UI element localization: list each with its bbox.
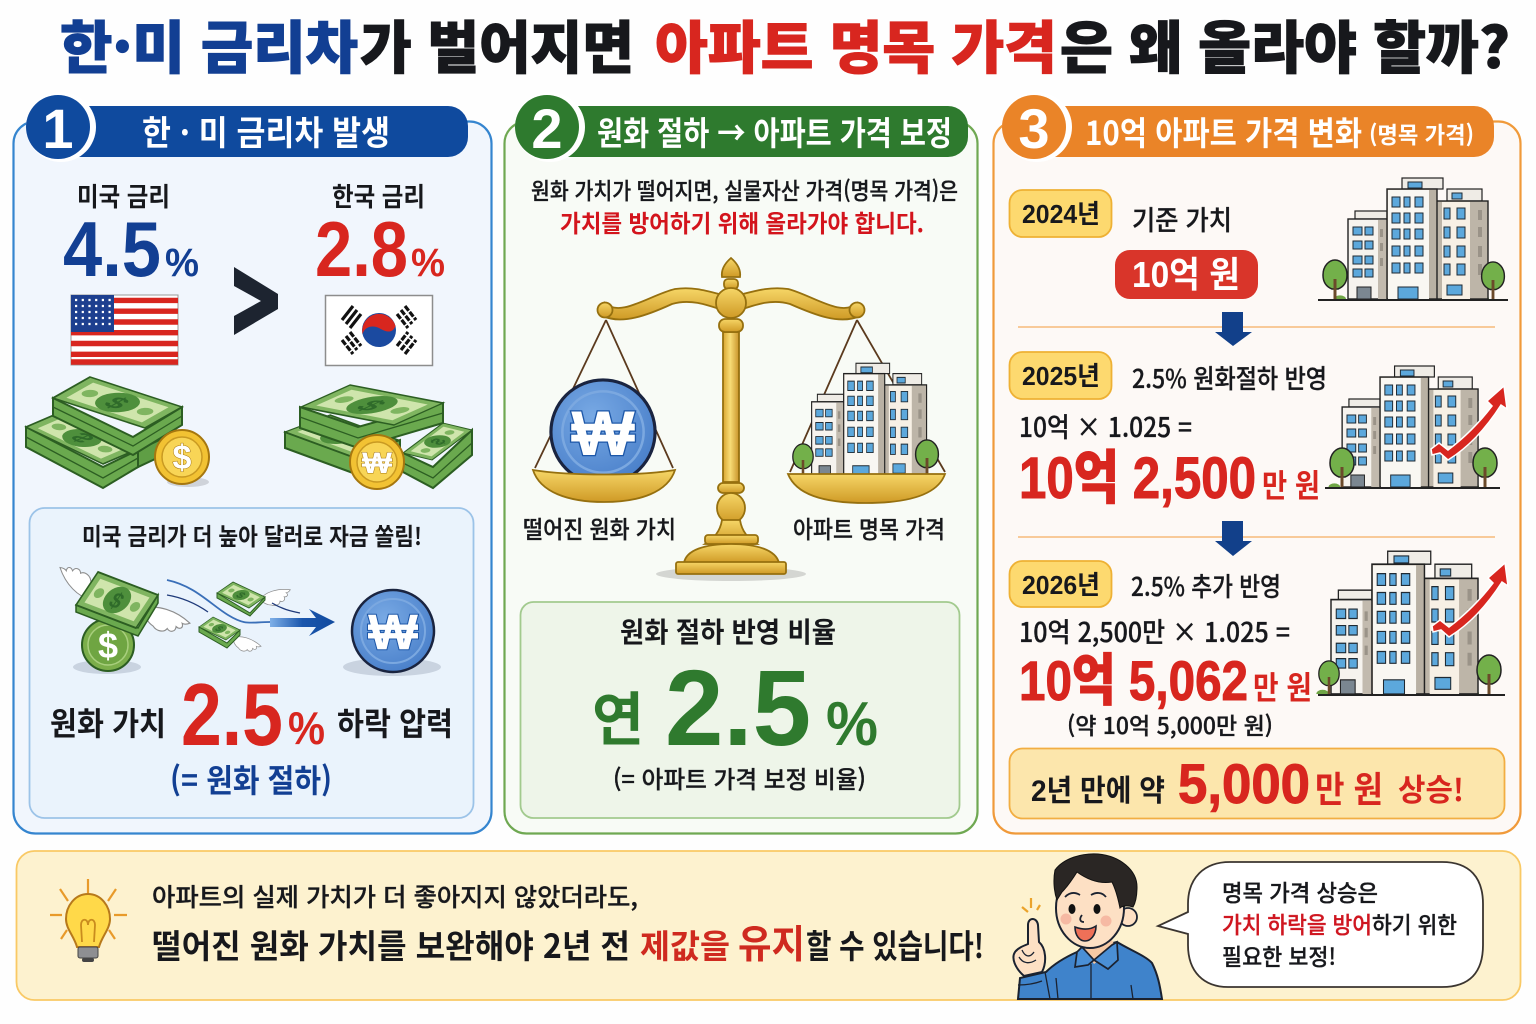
text: explanation: 원화 가치가 떨어지면, 실물자산 가격(명목 가격)은 xyxy=(531,172,958,206)
US rate xyxy=(63,177,199,293)
greater-than sign xyxy=(234,267,278,335)
header: step 3: (명목 가격) xyxy=(1369,116,1474,150)
header: step 2: 원화 절하 → 아파트 가격 보정 xyxy=(597,107,952,155)
callout: capital flight xyxy=(30,508,474,818)
row: 2024: 10억 원 xyxy=(1132,254,1240,295)
icon: balance scale xyxy=(535,258,945,581)
title xyxy=(60,3,1510,85)
header: step 1: 한 · 미 금리차 발생 xyxy=(142,106,390,155)
icon: left pan xyxy=(533,470,675,502)
text: explanation xyxy=(531,172,958,239)
label: nominal apartment price: 아파트 명목 가격 xyxy=(793,510,945,545)
arrow xyxy=(270,609,335,636)
US rate: 미국 금리 xyxy=(77,177,170,214)
callout: capital flight: 미국 금리가 더 높아 달러로 자금 쏠림! xyxy=(82,517,422,552)
row: 2024 xyxy=(1010,190,1258,299)
row: 2026: (약 10억 5,000만 원) xyxy=(1067,707,1273,741)
row: 2026: 10억 5,062 xyxy=(1019,649,1248,712)
text: takeaway: 제값을 xyxy=(640,920,730,968)
callout: speech bubble: 필요한 보정! xyxy=(1222,938,1336,972)
header: step 2 xyxy=(515,92,968,162)
title: 한·미 금리차 xyxy=(60,3,358,85)
row: 2026: 2.5% 추가 반영 xyxy=(1131,567,1281,604)
US rate: % xyxy=(165,241,199,285)
text: won value pressure xyxy=(50,665,453,802)
text: explanation: 가치를 방어하기 위해 올라가야 합니다. xyxy=(560,204,924,239)
icon: won coin on pan xyxy=(551,380,655,484)
icon: apartments on pan xyxy=(793,363,938,477)
icon: Korea flag xyxy=(326,296,432,366)
row: 2024: 기준 가치 xyxy=(1132,199,1232,238)
header: step 1 xyxy=(26,92,468,162)
row: 2026 xyxy=(1010,561,1312,741)
header: step 3: 10억 아파트 가격 변화 xyxy=(1085,107,1362,155)
row: 2025 xyxy=(1010,352,1327,511)
panel: bottom takeaway xyxy=(16,851,1520,1000)
icon: flying dollars xyxy=(54,559,300,674)
callout: reflection rate: % xyxy=(826,690,878,759)
callout: reflection rate: 2.5 xyxy=(665,647,811,768)
callout: reflection rate xyxy=(520,602,960,818)
text: won value pressure: % xyxy=(288,702,325,754)
icon: right pan xyxy=(788,474,945,503)
row: 2025: 만 원 xyxy=(1262,461,1320,507)
Korea rate: 2.8 xyxy=(315,205,408,293)
icon: won cash stack xyxy=(285,385,472,488)
Korea rate xyxy=(315,177,445,293)
icon: apartments 2024 xyxy=(1318,178,1508,300)
Korea rate: % xyxy=(411,241,445,285)
text: won value pressure: 하락 압력 xyxy=(337,699,453,745)
callout: total rise: 2년 만에 약 xyxy=(1031,775,1165,808)
arrow down xyxy=(1215,312,1252,346)
title: 은 왜 올라야 할까? xyxy=(1060,3,1510,85)
title: 아파트 명목 가격 xyxy=(655,3,1057,85)
icon: apartments 2025 with rising arrow xyxy=(1325,366,1507,488)
panel: 1 interest rate gap xyxy=(14,92,492,834)
icon: flying dollars: $ xyxy=(98,625,118,666)
callout: speech bubble: 가치 하락을 방어 xyxy=(1222,906,1372,940)
icon: won coin xyxy=(343,590,441,676)
US rate: 4.5 xyxy=(63,205,161,293)
row: 2025: 10억 2,500 xyxy=(1019,446,1256,511)
panel: 3 apartment price change xyxy=(994,92,1520,834)
header: step 3: 3 xyxy=(1018,97,1050,160)
Korea rate: 한국 금리 xyxy=(332,177,425,214)
callout: speech bubble xyxy=(1158,862,1483,987)
callout: total rise: 5,000 xyxy=(1178,752,1310,815)
row: 2025: 2025년 xyxy=(1022,361,1100,391)
callout: total rise xyxy=(1010,748,1504,818)
divider xyxy=(1018,327,1495,537)
header: step 3 xyxy=(1002,92,1494,162)
icon: dollar coin: $ xyxy=(173,439,192,477)
text: takeaway: 떨어진 원화 가치를 보완해야 2년 전 xyxy=(152,920,630,968)
text: won value pressure: 2.5 xyxy=(181,665,283,764)
icon: dollar cash stack xyxy=(26,377,182,488)
icon: presenter character xyxy=(1013,854,1162,999)
callout: reflection rate: (= 아파트 가격 보정 비율) xyxy=(613,760,866,795)
row: 2025: 2.5% 원화절하 반영 xyxy=(1132,359,1327,396)
callout: speech bubble: 명목 가격 상승은 xyxy=(1222,874,1378,908)
text: takeaway: 유지 xyxy=(738,914,805,970)
title: 가 벌어지면 xyxy=(360,3,634,85)
row: 2026: 10억 2,500만 × 1.025 = xyxy=(1019,611,1290,650)
text: won value pressure: (= 원화 절하) xyxy=(170,756,332,802)
arrow down xyxy=(1215,521,1252,556)
text: won value pressure: 원화 가치 xyxy=(50,699,166,745)
icon: dollar coin xyxy=(155,430,209,487)
header: step 2: 2 xyxy=(531,97,563,160)
callout: total rise: 상승! xyxy=(1398,765,1464,810)
text: takeaway: 할 수 있습니다! xyxy=(806,920,984,968)
panel: 2 won depreciation xyxy=(504,92,978,834)
icon: light bulb xyxy=(50,879,127,962)
icon: apartments 2026 with rising arrow xyxy=(1316,551,1508,695)
text: takeaway xyxy=(152,878,984,970)
row: 2025: 10억 × 1.025 = xyxy=(1019,406,1192,445)
icon: US flag xyxy=(71,295,178,365)
row: 2026: 2026년 xyxy=(1022,570,1100,600)
header: step 1: 1 xyxy=(42,97,74,160)
label: fallen won value: 떨어진 원화 가치 xyxy=(523,510,676,545)
callout: speech bubble: 하기 위한 xyxy=(1372,906,1457,940)
callout: total rise: 만 원 xyxy=(1315,761,1383,813)
row: 2024: 2024년 xyxy=(1022,199,1100,229)
icon: won coin: ₩ xyxy=(362,447,393,480)
icon: won coin xyxy=(350,435,404,489)
row: 2026: 만 원 xyxy=(1253,663,1312,709)
callout: reflection rate: 연 xyxy=(592,673,644,757)
callout: reflection rate: 원화 절하 반영 비율 xyxy=(620,611,836,651)
text: takeaway: 아파트의 실제 가치가 더 좋아지지 않았더라도, xyxy=(152,878,638,914)
